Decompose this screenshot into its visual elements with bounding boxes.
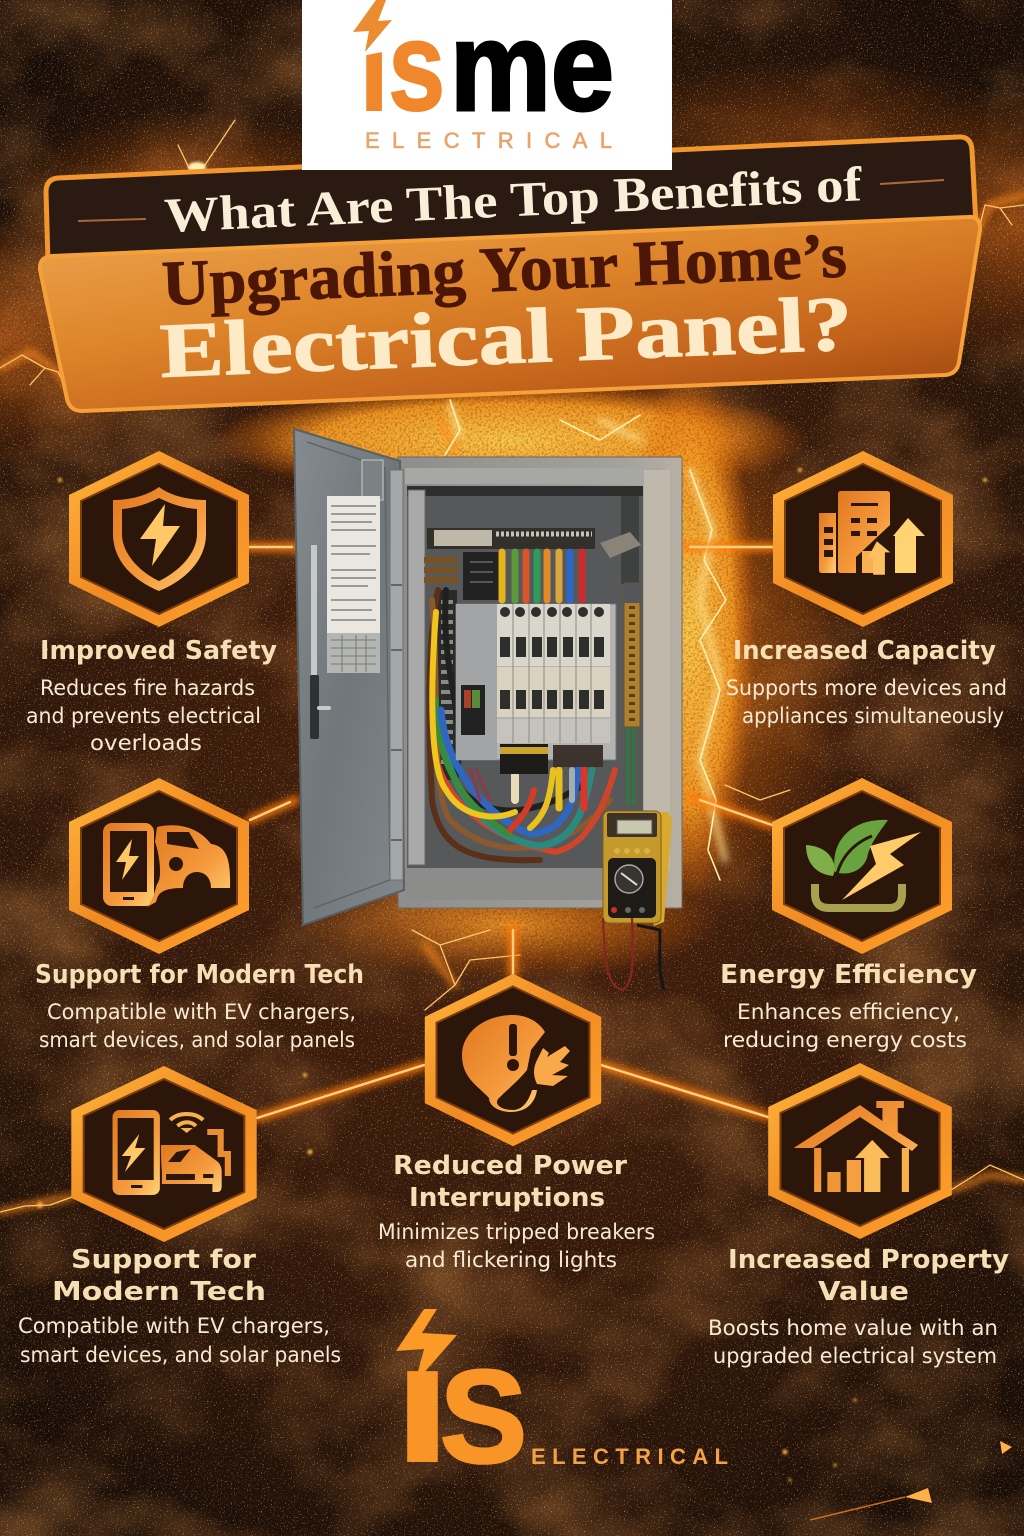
- heading: Increased Capacity: [733, 636, 996, 666]
- benefit: Support for Modern Tech (wifi): [18, 1066, 341, 1367]
- heading: Improved Safety: [40, 636, 277, 666]
- hexagon badge with house and growth icon: [768, 1063, 952, 1239]
- embers and glints: [37, 468, 1012, 1520]
- orange lower ribbon: [40, 217, 980, 411]
- description: and flickering lights: [405, 1248, 617, 1272]
- top busbar: [427, 528, 641, 600]
- benefit: Reduced Power Interruptions: [378, 974, 655, 1272]
- benefit: Support for Modern Tech (EV and phone): [35, 778, 364, 1052]
- description: [378, 1220, 655, 1272]
- description: [708, 1316, 998, 1368]
- door instruction sheet: [327, 496, 380, 633]
- description: appliances simultaneously: [742, 704, 1004, 728]
- hexagon badge with buildings and arrows icon: [773, 451, 953, 627]
- heading: Increased Property: [728, 1245, 1009, 1275]
- dark upper ribbon: [46, 137, 976, 262]
- heading: Support for: [71, 1245, 256, 1275]
- benefit: Energy Efficiency: [720, 778, 977, 1052]
- footer logo: [393, 1309, 728, 1490]
- description: smart devices, and solar panels: [20, 1343, 341, 1367]
- heading: Interruptions: [409, 1183, 605, 1213]
- heading: [52, 1245, 266, 1307]
- description: Compatible with EV chargers,: [18, 1314, 330, 1338]
- description: reducing energy costs: [723, 1028, 967, 1052]
- description: [18, 1314, 341, 1367]
- breaker block: [456, 604, 616, 774]
- logo subtitle: ELECTRICAL: [365, 128, 612, 153]
- hexagon badge with shield icon: [69, 451, 249, 627]
- footer wordmark: ELECTRICAL: [531, 1444, 728, 1469]
- connector lines: [248, 547, 776, 1118]
- logo wordmark: is: is: [360, 0, 445, 137]
- heading: Modern Tech: [52, 1277, 266, 1307]
- door circuit table: [327, 633, 380, 673]
- multimeter probes: [603, 918, 633, 990]
- description: Enhances efficiency,: [737, 1000, 960, 1024]
- right terminal strip: [624, 583, 640, 805]
- heading: [728, 1245, 1009, 1307]
- logo wordmark: me: me: [450, 0, 614, 137]
- title line three: Electrical Panel?: [158, 279, 854, 394]
- multimeter: [603, 811, 672, 990]
- heading: Value: [818, 1277, 909, 1307]
- logo bolt: [353, 0, 392, 52]
- description: Boosts home value with an: [708, 1316, 998, 1340]
- title line two: Upgrading Your Home’s: [161, 219, 848, 319]
- description: [39, 1000, 356, 1052]
- description: Supports more devices and: [726, 676, 1007, 700]
- heading: Energy Efficiency: [720, 960, 977, 990]
- hexagon badge with alert and plug icon: [425, 974, 601, 1146]
- door handle: [311, 545, 317, 675]
- description: and prevents electrical: [26, 704, 261, 728]
- footer bolt: [396, 1309, 457, 1383]
- description: Compatible with EV chargers,: [47, 1000, 356, 1024]
- description: upgraded electrical system: [713, 1344, 997, 1368]
- hexagon badge with phone, wifi and car icon: [71, 1066, 257, 1242]
- heading: Support for Modern Tech: [35, 960, 364, 990]
- benefit: Improved Safety: [26, 451, 277, 755]
- logo dot cover: [358, 10, 392, 56]
- benefit: Increased Property Value: [708, 1063, 1009, 1368]
- hexagon badge with phone and car icon: [69, 778, 249, 954]
- logo card: [302, 0, 672, 170]
- description: overloads: [90, 731, 202, 755]
- description: [723, 1000, 967, 1052]
- description: smart devices, and solar panels: [39, 1028, 355, 1052]
- small ribbon rules: [78, 180, 944, 221]
- lightning arcs: [0, 120, 1024, 1212]
- title line one: What Are The Top Benefits of: [163, 156, 864, 243]
- hexagon badge with leaf and bolt icon: [772, 778, 952, 954]
- heading: Reduced Power: [393, 1151, 627, 1181]
- wiring loom: [424, 560, 615, 860]
- cabinet interior: [407, 486, 643, 868]
- title banner: [40, 137, 980, 411]
- footer monogram S: S: [440, 1343, 527, 1490]
- description: Reduces fire hazards: [40, 676, 255, 700]
- electrical panel illustration: [294, 429, 682, 990]
- cabinet body: [398, 457, 682, 908]
- coloured feed wires: [502, 552, 582, 600]
- open door: [294, 429, 404, 925]
- heading: [393, 1151, 627, 1213]
- footer monogram I: I: [393, 1343, 452, 1490]
- description: [726, 676, 1007, 728]
- benefit: Increased Capacity: [726, 451, 1007, 728]
- description: [26, 676, 261, 755]
- description: Minimizes tripped breakers: [378, 1220, 655, 1244]
